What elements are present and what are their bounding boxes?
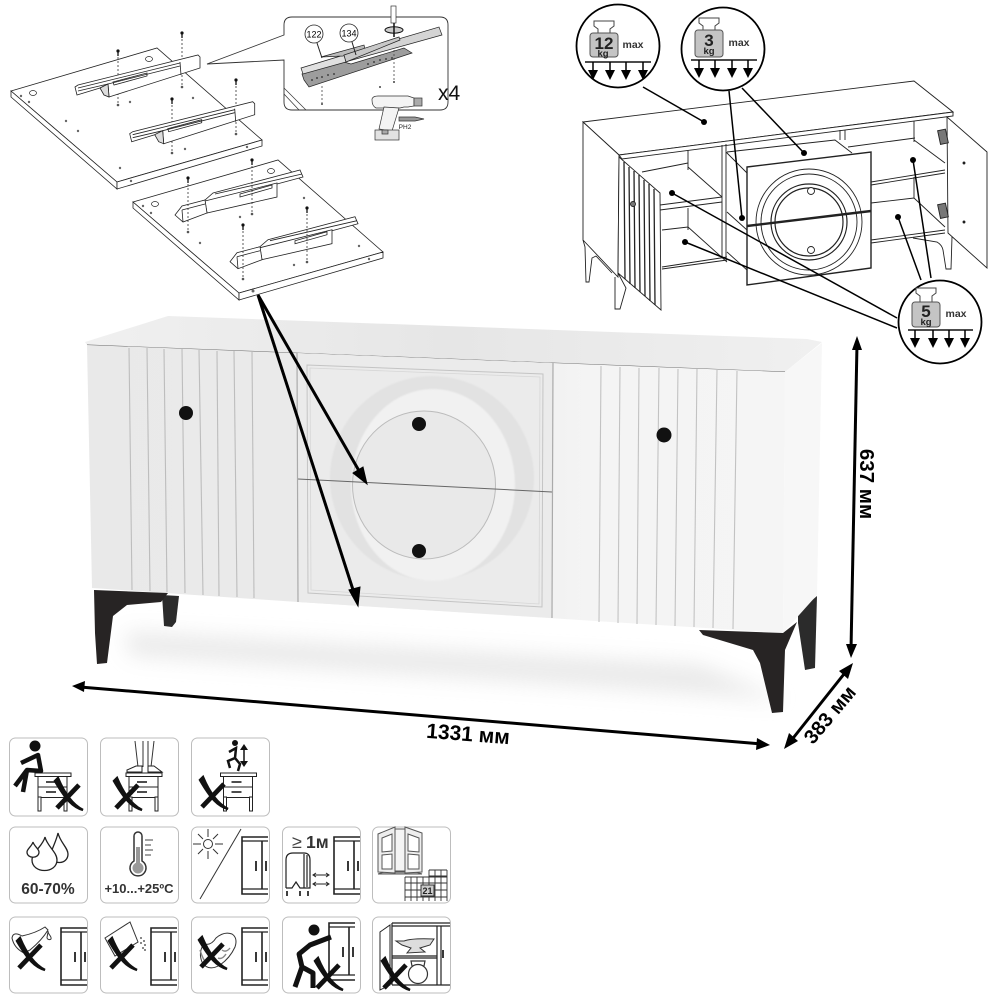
badge: 3 kg max: 3 [704,31,714,50]
upper drawer board [11,48,262,189]
drawer fronts [747,152,871,285]
icon: windows and room conditions [372,827,450,903]
floor shadow [125,632,785,700]
icon: no rough cloth [192,917,270,993]
icon: keep 1 m from heater: ≥ [292,832,302,852]
badge: 3 kg max: kg [703,46,715,57]
lower drawer board [133,160,383,300]
icon: do not move by pushing [282,917,360,993]
dimension: height [846,336,878,658]
screws upper [116,49,120,106]
icon: keep 1 m from heater: 1м [306,832,329,852]
cabinet body [583,81,953,155]
right door grooves [599,366,737,629]
badge: 3 kg max: max [728,37,750,49]
right door [938,117,987,268]
rail 2 [130,102,255,144]
badge: 5 kg max: max [945,308,967,320]
dimension: width: 1331 мм [425,720,511,749]
left door grooves [129,348,254,598]
callout 134 [340,24,358,55]
callout 134: 134 [341,28,357,38]
right side panel [783,343,822,633]
legs [583,240,626,309]
icon: windows and room conditions: 21 [422,886,433,896]
left door [618,157,661,310]
rail 4 [230,217,358,269]
dimension: depth [784,663,861,749]
arrows from assembly to drawers [258,295,367,606]
icon: no abrasive powder [100,917,178,993]
back legs [162,595,817,670]
top surface [85,316,822,372]
icon: humidity 60-70%: 60-70% [21,881,75,898]
assembly diagram [11,31,383,300]
inner compartments [642,150,727,269]
inset rail [301,27,442,87]
front legs [94,590,797,713]
badge: 5 kg max [898,280,982,364]
main sideboard product [85,316,822,713]
screwdriver [385,6,403,37]
front face [87,345,785,633]
load capacity cabinet diagram [583,81,987,310]
icon: temperature range: +10...+25ºC [104,881,174,896]
drill [372,96,424,140]
detail inset [207,6,460,140]
icon: do not stand on furniture [100,738,178,816]
icon: temperature range [100,827,178,903]
badge: 12 kg max: kg [597,48,609,60]
badge: 12 kg max [576,4,660,88]
x4 label: x4 [438,82,460,105]
icon: no heavy objects in shelves [372,917,450,993]
leader lines [643,87,931,328]
badge: 12 kg max: max [622,39,644,51]
icon: humidity 60-70% [10,827,88,903]
badge: 12 kg max: 12 [595,34,613,53]
dimension: height: 637 мм [855,449,878,519]
rail 3 [175,170,303,222]
icon: do not sit on furniture [10,738,88,816]
rail 1 [75,55,200,97]
icon: avoid direct sunlight [192,827,270,903]
icon: keep 1 m from heater [282,827,360,903]
badge: 5 kg max: kg [920,317,932,328]
callout 122: 122 [306,30,322,40]
centre drawers [297,353,553,618]
callout 122 [305,25,323,58]
badge: 5 kg max: 5 [921,302,931,321]
badge: 3 kg max [682,8,764,90]
dimension: depth: 383 мм [800,682,861,748]
knobs [179,406,672,558]
icon: do not jump on furniture [192,738,270,816]
icon: no liquids [10,917,88,993]
dimension: width [72,681,770,750]
PH2 label: PH2 [399,124,412,131]
